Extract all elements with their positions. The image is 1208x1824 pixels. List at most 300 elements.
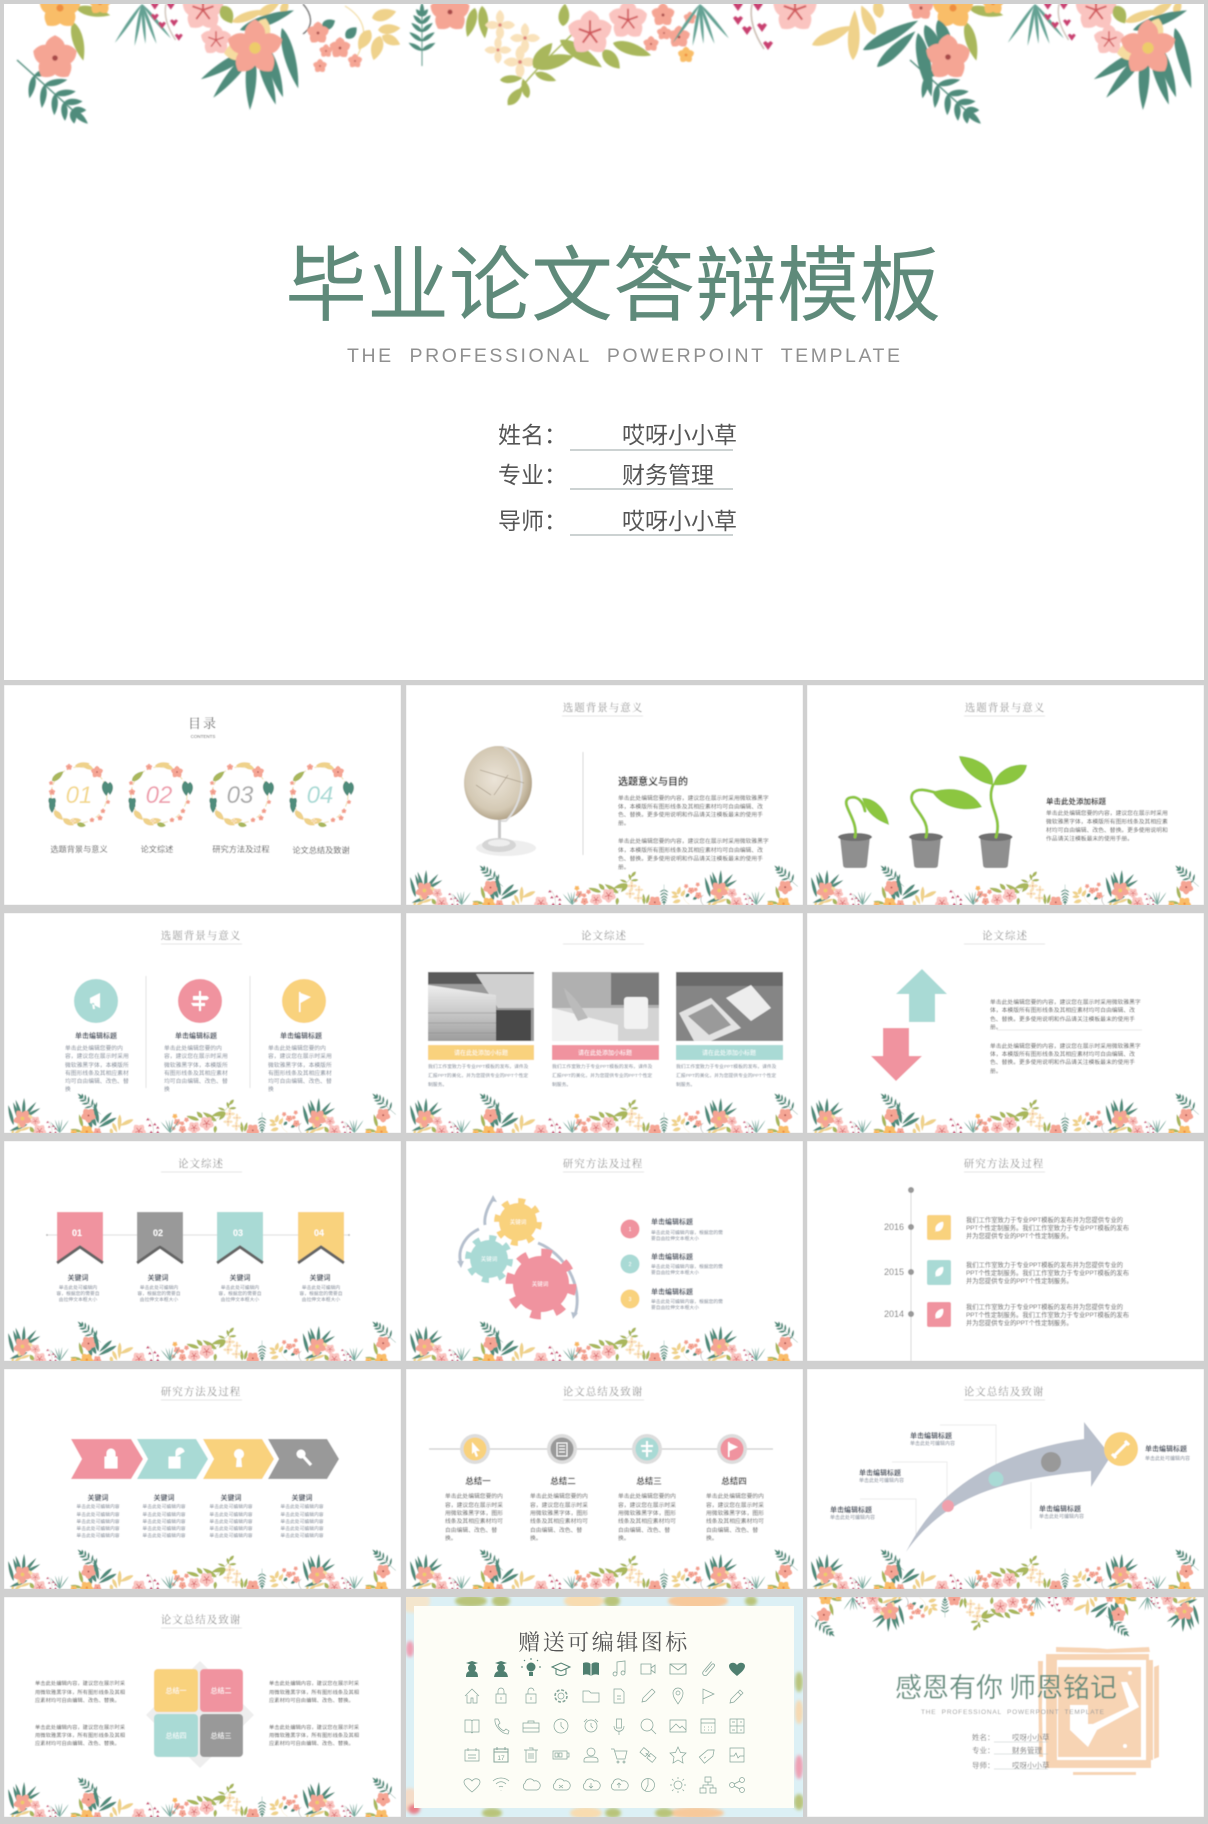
chevron: key	[268, 1439, 339, 1479]
timeline item 2014: 2014	[884, 1309, 904, 1319]
panel: four summaries slide	[406, 1369, 803, 1595]
keyword text 4	[299, 1273, 343, 1303]
keyword column 4: 单击此处可编辑内容	[280, 1511, 324, 1518]
label bottom: 单击此处可编辑内容	[830, 1514, 875, 1521]
panel: contents	[4, 685, 401, 905]
keyword text 3	[218, 1273, 262, 1303]
list item 3: 单击此处可编辑内容，根据您的需	[651, 1298, 723, 1305]
wreath 01: 01	[66, 782, 92, 809]
keyword text 2: 容，根据您的需要自	[137, 1290, 181, 1297]
summary 1: 总结一	[465, 1476, 491, 1486]
summary 3: 总结三	[636, 1476, 662, 1486]
keyword column 4: 关键词	[292, 1493, 312, 1502]
keyword text 2: 由拉伸文本框大小	[140, 1296, 178, 1303]
right text: 单击此处编辑内容，建议您在展示时采	[269, 1679, 360, 1687]
keyword column 4	[280, 1493, 324, 1539]
right text: 用微软雅黑字体，所有图形线条及其相	[269, 1688, 359, 1696]
wreath 02	[127, 761, 193, 828]
timeline axis	[908, 1187, 914, 1361]
icon row 2: outline tools	[465, 1688, 743, 1704]
text body: 单击此处编辑您要的内容，建议您在展示时采用	[1046, 809, 1168, 817]
summary 1: 用微软雅黑字体，图形	[445, 1509, 503, 1517]
timeline item 2014: 我们工作室致力于专业PPT模板的发布并为您提供专业的	[966, 1302, 1123, 1311]
icon row 1: solid and outline	[466, 1658, 745, 1677]
text body: 单击此处编辑您要的内容，建议您在展示时采用微软雅黑字	[618, 837, 769, 845]
label right: 单击此处可编辑内容	[1145, 1455, 1190, 1462]
label middle: 单击此处可编辑内容	[859, 1477, 904, 1484]
list item 1: 1	[629, 1227, 632, 1233]
panel: rising arrow slide	[807, 1369, 1204, 1595]
label top: 单击编辑标题	[910, 1431, 952, 1440]
text block: 色、替换。更多使用说明和作品请关注模板最末的使用手	[990, 1015, 1135, 1023]
icon row 4: outline objects	[465, 1747, 744, 1763]
heading	[964, 928, 1045, 944]
form: 姓名：	[972, 1732, 994, 1742]
panel: ribbons slide	[4, 1141, 401, 1367]
summary 2: 总结二	[550, 1476, 576, 1486]
tile: summary 2	[200, 1669, 243, 1712]
column text 2	[164, 1031, 228, 1093]
ribbon 01	[57, 1212, 103, 1263]
column text 1	[65, 1031, 129, 1093]
timeline item 2014: 并为您提供专业的PPT个性定制服务。	[966, 1318, 1073, 1327]
floral border	[810, 1088, 1203, 1139]
form: 导师：	[972, 1760, 994, 1770]
timeline item 2014: PPT个性定制服务。我们工作室致力于专业PPT模板的发布	[966, 1310, 1129, 1319]
ribbon 03	[217, 1212, 263, 1263]
panel: globe slide	[406, 685, 803, 911]
form	[972, 1732, 1050, 1770]
subtitle: THE PROFESSIONAL POWERPOINT TEMPLATE	[921, 1709, 1105, 1716]
panel: timeline slide	[807, 1141, 1204, 1361]
text block: 册。	[990, 1024, 1002, 1031]
list item 2: 单击编辑标题	[651, 1252, 693, 1261]
keyword text 1: 由拉伸文本框大小	[59, 1296, 97, 1303]
keyword column 2: 关键词	[154, 1493, 174, 1502]
timeline item 2015	[884, 1260, 1129, 1285]
timeline item 2016: 我们工作室致力于专业PPT模板的发布并为您提供专业的	[966, 1215, 1123, 1224]
wreath 04	[288, 761, 354, 828]
list item 3: 单击编辑标题	[651, 1287, 693, 1296]
form: name, major, advisor: 专业：	[498, 462, 567, 488]
keyword text 1: 容，根据您的需要自	[56, 1290, 100, 1297]
caption card 2: 制服务。	[552, 1081, 571, 1088]
timeline item 2016: 并为您提供专业的PPT个性定制服务。	[966, 1231, 1073, 1240]
caption card 3: 汇报PPT的美化，并为您提供专业的PPT个性定	[676, 1072, 776, 1079]
node 2: notes	[547, 1434, 577, 1464]
node 3: sign	[632, 1434, 662, 1464]
keyword column 2: 单击此处可编辑内容	[142, 1511, 186, 1518]
list item 2: 要自由拉伸文本框大小	[651, 1269, 699, 1276]
gear diagram: 关键词	[510, 1218, 527, 1226]
label right	[1145, 1444, 1190, 1462]
progress dots	[942, 1452, 1061, 1512]
section labels	[50, 844, 350, 855]
timeline item 2016	[884, 1215, 1129, 1240]
keyword column 3	[209, 1493, 253, 1539]
icon row 3: outline objects	[465, 1719, 744, 1735]
chevron: keyhole	[203, 1439, 274, 1479]
ribbon 02	[137, 1212, 183, 1263]
column text 3: 均可自由编辑、改色、替	[268, 1077, 332, 1085]
gear diagram: 关键词	[481, 1255, 498, 1263]
column text 3: 微软雅黑字体，本模版所	[268, 1061, 332, 1069]
column text 3: 单击编辑标题	[280, 1031, 322, 1040]
column text 3: 容，建议您在展示时采用	[268, 1052, 332, 1060]
caption card 3	[676, 1045, 783, 1088]
heading	[563, 928, 644, 944]
heading: 选题背景与意义	[563, 700, 643, 715]
heading: 论文总结及致谢	[563, 1384, 643, 1399]
curved arrow	[906, 1422, 1111, 1552]
floral border	[408, 1088, 802, 1139]
caption card 3: 我们工作室致力于专业PPT模板的发布，课件及	[676, 1063, 777, 1070]
icon: wrench circle	[1104, 1432, 1138, 1466]
caption card 2: 我们工作室致力于专业PPT模板的发布，课件及	[552, 1063, 653, 1070]
list item 1: 单击编辑标题	[651, 1217, 693, 1226]
keyword column 2: 单击此处可编辑内容	[142, 1532, 186, 1539]
section labels: 论文综述	[141, 844, 173, 854]
form: 哎呀小小草	[1012, 1732, 1050, 1742]
wreath 01	[47, 761, 113, 828]
tile: summary 2: 总结二	[210, 1686, 232, 1695]
keyword text 4: 关键词	[310, 1273, 330, 1282]
node 1: cursor	[460, 1434, 490, 1464]
arrow up	[896, 969, 947, 1022]
heading: 研究方法及过程	[161, 1384, 241, 1399]
diamond backdrop	[146, 1661, 254, 1768]
text body: 册。	[618, 864, 630, 871]
left text: 单击此处编辑内容，建议您在展示时采	[35, 1679, 126, 1687]
title: 感恩有你 师恩铭记	[895, 1666, 1117, 1705]
heading: 论文总结及致谢	[964, 1384, 1044, 1399]
panel: three columns slide	[4, 913, 401, 1139]
heading: 选题背景与意义	[965, 700, 1045, 715]
connector line	[46, 1234, 350, 1236]
column text 1: 单击编辑标题	[75, 1031, 117, 1040]
right text: 用微软雅黑字体，所有图形线条及其相	[269, 1731, 359, 1739]
caption card 1: 汇报PPT的美化，并为您提供专业的PPT个性定	[428, 1072, 528, 1079]
section labels: 论文总结及致谢	[292, 845, 350, 855]
wreath 03	[208, 761, 274, 828]
summary 3: 换。	[618, 1534, 630, 1542]
caption card 2: 汇报PPT的美化，并为您提供专业的PPT个性定	[552, 1072, 652, 1079]
form: 财务管理	[1012, 1745, 1042, 1755]
right text: 应素材均可自由编辑、改色、替换。	[269, 1696, 354, 1704]
floral border	[7, 1544, 400, 1595]
summary 4	[706, 1476, 764, 1542]
summary 2	[530, 1476, 588, 1542]
icon row 5: outline web	[464, 1777, 744, 1793]
heading	[161, 1156, 242, 1172]
keyword column 1: 关键词	[88, 1493, 108, 1502]
patterned flower background	[398, 1589, 804, 1819]
icon: flag circle	[282, 979, 326, 1023]
sub heading: CONTENTS	[191, 734, 215, 739]
tile: summary 1	[154, 1669, 198, 1712]
floral border	[7, 1316, 400, 1367]
column text 1: 有图形线条及其相应素材	[65, 1069, 129, 1077]
label right: 单击编辑标题	[1145, 1444, 1187, 1453]
floral border	[410, 865, 798, 905]
column text 3	[268, 1031, 332, 1093]
keyword column 4: 单击此处可编辑内容	[280, 1518, 324, 1525]
column text 1: 均可自由编辑、改色、替	[65, 1077, 129, 1085]
summary 3: 自由编辑、改色、替	[618, 1526, 670, 1534]
list item 3	[620, 1287, 723, 1311]
summary 1: 单击此处编辑您要的内	[445, 1492, 503, 1500]
panel: main title slide	[2, 0, 1204, 680]
heading: 论文综述	[581, 928, 627, 943]
caption card 3: 请在此处添加小标题	[702, 1049, 756, 1057]
keyword column 2: 单击此处可编辑内容	[142, 1525, 186, 1532]
heading: 研究方法及过程	[964, 1156, 1044, 1171]
icon: sign circle	[178, 979, 222, 1023]
list item 2: 2	[629, 1262, 632, 1268]
text block: 体，本模版所有图形线条及其相应素材均可自由编辑、改	[990, 1006, 1135, 1014]
summary 3: 线条及其相应素材均可	[618, 1517, 676, 1525]
ribbon 04	[298, 1212, 344, 1263]
timeline item 2014	[884, 1302, 1129, 1327]
keyword column 2: 单击此处可编辑内容	[142, 1518, 186, 1525]
label middle: 单击编辑标题	[859, 1468, 901, 1477]
ribbon 04: 04	[314, 1228, 324, 1238]
heading: 论文总结及致谢	[161, 1612, 241, 1627]
form: name, major, advisor: 姓名：	[498, 422, 567, 448]
left text: 用微软雅黑字体，所有图形线条及其相	[35, 1731, 125, 1739]
photo: books	[428, 972, 534, 1041]
column text 1: 单击此处编辑您要的内	[65, 1044, 123, 1052]
text body: 作品请关注模板最末的使用手册。	[1046, 834, 1133, 842]
globe image	[464, 746, 536, 856]
floral garland	[807, 1591, 1200, 1642]
label lower: 单击此处可编辑内容	[1039, 1513, 1084, 1520]
chevron: lock	[71, 1439, 143, 1479]
summary 1: 线条及其相应素材均可	[445, 1517, 503, 1525]
floral border	[7, 1772, 400, 1823]
caption card 1	[428, 1045, 534, 1088]
keyword column 1: 单击此处可编辑内容	[76, 1503, 120, 1510]
heading: 论文综述	[178, 1156, 224, 1171]
form: name, major, advisor: 财务管理	[622, 462, 714, 488]
summary 4: 单击此处编辑您要的内	[706, 1492, 764, 1500]
icon: megaphone circle	[74, 979, 118, 1023]
keyword text 3: 关键词	[230, 1273, 250, 1282]
column text 1: 容，建议您在展示时采用	[65, 1052, 129, 1060]
column text 2: 容，建议您在展示时采用	[164, 1052, 228, 1060]
wreath 04: 04	[307, 782, 333, 809]
photo: mug and notebook	[552, 972, 659, 1041]
chevron: open lock	[137, 1439, 208, 1479]
keyword text 4: 容，根据您的需要自	[299, 1290, 343, 1297]
divider	[582, 752, 584, 855]
form: name, major, advisor	[498, 422, 737, 535]
section labels: 研究方法及过程	[212, 844, 270, 854]
caption card 1: 请在此处添加小标题	[454, 1049, 508, 1057]
panel: photo cards slide	[406, 913, 803, 1139]
floral border	[408, 1544, 802, 1595]
plants in pots	[838, 756, 1027, 868]
timeline item 2015: 我们工作室致力于专业PPT模板的发布并为您提供专业的	[966, 1260, 1123, 1269]
column text 3: 换	[268, 1085, 274, 1093]
summary 4: 容，建议您在展示时采	[706, 1501, 764, 1509]
column text 2: 均可自由编辑、改色、替	[164, 1077, 228, 1085]
timeline item 2016: 2016	[884, 1222, 904, 1232]
text body: 体，本模版所有图形线条及其相应素材均可自由编辑、改	[618, 846, 763, 854]
keyword column 3: 单击此处可编辑内容	[209, 1525, 253, 1532]
text body: 色、替换。更多使用说明和作品请关注模板最末的使用手	[618, 854, 763, 862]
keyword column 4: 单击此处可编辑内容	[280, 1532, 324, 1539]
panel: plant growth slide	[807, 685, 1204, 911]
panel: free icons slide	[398, 1589, 804, 1819]
column text 2: 单击编辑标题	[175, 1031, 217, 1040]
ribbon 03: 03	[233, 1228, 243, 1238]
summary 1: 容，建议您在展示时采	[445, 1501, 503, 1509]
keyword text 1	[56, 1273, 100, 1303]
left text: 用微软雅黑字体，所有图形线条及其相	[35, 1688, 125, 1696]
label lower: 单击编辑标题	[1039, 1504, 1081, 1513]
text body: 微软雅黑字体，本模版所有图形线条及其相应素	[1046, 818, 1168, 826]
text body: 单击此处编辑您要的内容，建议您在展示时采用微软雅黑字	[618, 794, 769, 802]
list item 2: 单击此处可编辑内容，根据您的需	[651, 1263, 723, 1270]
subtitle: THE PROFESSIONAL POWERPOINT TEMPLATE	[347, 345, 900, 367]
list item 1: 单击此处可编辑内容，根据您的需	[651, 1229, 723, 1236]
summary 2: 容，建议您在展示时采	[530, 1501, 588, 1509]
caption card 1: 我们工作室致力于专业PPT模板的发布，课件及	[428, 1063, 529, 1070]
text block: 体，本模版所有图形线条及其相应素材均可自由编辑、改	[990, 1050, 1135, 1058]
leader lines	[860, 1425, 1031, 1536]
summary 4: 总结四	[721, 1476, 747, 1486]
keyword text 2	[137, 1273, 181, 1303]
keyword column 1: 单击此处可编辑内容	[76, 1511, 120, 1518]
keyword column 1: 单击此处可编辑内容	[76, 1518, 120, 1525]
list item 1: 要自由拉伸文本框大小	[651, 1235, 699, 1242]
form: name, major, advisor: 哎呀小小草	[622, 422, 737, 448]
label lower	[1039, 1504, 1084, 1520]
node 4: flag	[717, 1434, 747, 1464]
text block: 单击此处编辑您要的内容，建议您在展示时采用微软雅黑字	[990, 998, 1141, 1006]
keyword column 3: 单击此处可编辑内容	[209, 1503, 253, 1510]
form: name, major, advisor: 哎呀小小草	[622, 508, 737, 534]
heading: 赠送可编辑图标	[518, 1626, 690, 1657]
tile: summary 1: 总结一	[166, 1686, 186, 1695]
panel: quadrant slide	[4, 1597, 401, 1823]
keyword column 3: 单击此处可编辑内容	[209, 1532, 253, 1539]
text body: 体，本模版所有图形线条及其相应素材均可自由编辑、改	[618, 802, 763, 810]
label bottom	[830, 1505, 875, 1521]
label top	[910, 1431, 955, 1447]
summary 2: 单击此处编辑您要的内	[530, 1492, 588, 1500]
gear diagram	[457, 1195, 578, 1319]
caption card 3: 制服务。	[676, 1081, 695, 1088]
tile: summary 4: 总结四	[166, 1731, 186, 1740]
keyword column 4: 单击此处可编辑内容	[280, 1503, 324, 1510]
form: 哎呀小小草	[1012, 1760, 1050, 1770]
heading: 选题背景与意义	[161, 928, 241, 943]
summary 2: 线条及其相应素材均可	[530, 1517, 588, 1525]
photo: tablet on desk	[676, 972, 783, 1041]
keyword text 3: 容，根据您的需要自	[218, 1290, 262, 1297]
keyword text 2: 关键词	[148, 1273, 168, 1282]
dividers	[146, 976, 250, 1088]
column text 2: 有图形线条及其相应素材	[164, 1069, 228, 1077]
summary 3: 用微软雅黑字体，图形	[618, 1509, 676, 1517]
timeline item 2015: 并为您提供专业的PPT个性定制服务。	[966, 1276, 1073, 1285]
right text: 应素材均可自由编辑、改色、替换。	[269, 1739, 354, 1747]
label middle	[859, 1468, 904, 1484]
heading: contents: 目录	[188, 713, 218, 732]
tile: summary 3: 总结三	[210, 1731, 232, 1740]
column text 2: 微软雅黑字体，本模版所	[164, 1061, 228, 1069]
keyword text 2: 单击此处可编辑内	[140, 1284, 178, 1291]
list item 2	[620, 1252, 723, 1276]
keyword text 1: 单击此处可编辑内	[59, 1284, 97, 1291]
panel: chevrons slide	[4, 1369, 401, 1595]
panel: thanks slide	[807, 1591, 1204, 1817]
summary 1: 自由编辑、改色、替	[445, 1526, 497, 1534]
summary 1: 换。	[445, 1534, 457, 1542]
summary 4: 用微软雅黑字体，图形	[706, 1509, 764, 1517]
floral border	[810, 860, 1203, 911]
ribbon 01: 01	[72, 1228, 82, 1238]
floral border	[408, 1316, 802, 1367]
keyword column 1	[76, 1493, 120, 1539]
caption card 2	[552, 1045, 659, 1088]
cream card	[414, 1606, 794, 1808]
keyword text 4: 由拉伸文本框大小	[302, 1296, 340, 1303]
list item 3: 3	[629, 1297, 632, 1303]
tile: summary 3	[200, 1714, 243, 1757]
summary 4: 换。	[706, 1534, 718, 1542]
summary 3: 单击此处编辑您要的内	[618, 1492, 676, 1500]
wreath 02: 02	[146, 782, 172, 809]
list item 1	[620, 1217, 723, 1242]
column text 3: 单击此处编辑您要的内	[268, 1044, 326, 1052]
arrow down	[871, 1028, 922, 1081]
text block: 单击此处编辑您要的内容，建议您在展示时采用微软雅黑字	[990, 1042, 1141, 1050]
keyword column 2	[142, 1493, 186, 1539]
keyword column 3: 关键词	[220, 1493, 242, 1502]
form: 专业：	[972, 1745, 994, 1755]
summary 4: 自由编辑、改色、替	[706, 1526, 758, 1534]
panel: arrows slide	[807, 913, 1204, 1139]
list item 3: 要自由拉伸文本框大小	[651, 1304, 699, 1311]
label top: 单击此处可编辑内容	[910, 1440, 955, 1447]
keyword column 3: 单击此处可编辑内容	[209, 1518, 253, 1525]
ribbon 02: 02	[153, 1228, 163, 1238]
floral border	[810, 1544, 1203, 1595]
summary 2: 用微软雅黑字体，图形	[530, 1509, 588, 1517]
timeline item 2015: 2015	[884, 1267, 904, 1277]
section labels: 选题背景与意义	[50, 844, 108, 854]
stamp logo	[1038, 1647, 1159, 1775]
label bottom: 单击编辑标题	[830, 1505, 872, 1514]
summary 4: 线条及其相应素材均可	[706, 1517, 764, 1525]
title: 毕业论文答辩模板	[285, 219, 941, 338]
floral garland top	[16, 4, 1192, 124]
summary 1	[445, 1476, 503, 1542]
left text: 应素材均可自由编辑、改色、替换。	[35, 1696, 120, 1704]
gear diagram: 关键词	[532, 1280, 549, 1288]
summary 2: 换。	[530, 1534, 542, 1542]
keyword text 4: 单击此处可编辑内	[302, 1284, 340, 1291]
heading: 研究方法及过程	[563, 1156, 643, 1171]
summary 2: 自由编辑、改色、替	[530, 1526, 582, 1534]
caption card 1: 制服务。	[428, 1081, 447, 1088]
form: name, major, advisor: 导师：	[498, 508, 567, 534]
floral border	[8, 1093, 396, 1133]
summary 3: 容，建议您在展示时采	[618, 1501, 676, 1509]
